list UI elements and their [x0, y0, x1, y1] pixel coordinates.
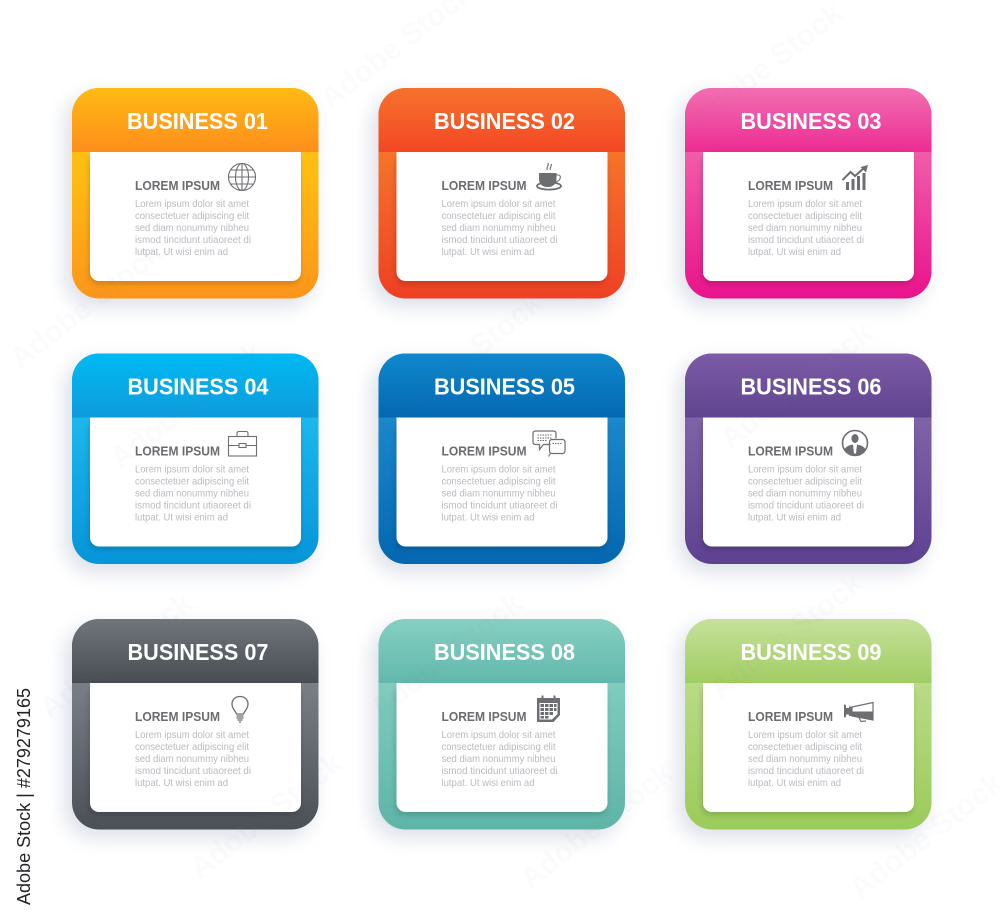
- text block: Lorem ipsum dolor sit amet: [135, 729, 249, 741]
- text block: ismod tincidunt utiaoreet di: [135, 765, 251, 777]
- heading: BUSINESS 02: [434, 108, 575, 134]
- text block: [135, 729, 251, 789]
- icon: megaphone: [844, 702, 873, 722]
- stock watermark overlay: Adobe Stock: [704, 566, 869, 706]
- text block: consectetuer adipiscing elit: [135, 741, 249, 753]
- text block: Lorem ipsum dolor sit amet: [748, 198, 862, 210]
- heading: BUSINESS 03: [740, 108, 882, 134]
- text block: [748, 198, 864, 258]
- text block: Lorem ipsum dolor sit amet: [442, 729, 556, 741]
- card: business 03: [677, 88, 932, 308]
- stock watermark overlay: Adobe Stock: [104, 336, 269, 476]
- text block: Lorem ipsum dolor sit amet: [748, 464, 862, 476]
- card: business 01: [64, 88, 318, 308]
- icon: coffee cup: [537, 163, 561, 190]
- text block: ismod tincidunt utiaoreet di: [748, 234, 864, 246]
- text block: sed diam nonummy nibheu: [442, 753, 556, 765]
- stock watermark overlay: Adobe Stock: [4, 236, 169, 376]
- heading: BUSINESS 05: [434, 374, 575, 400]
- card: business 09: [677, 619, 932, 839]
- icon: calendar: [537, 696, 560, 722]
- icon: chat bubbles: [533, 431, 565, 456]
- card: business 02: [370, 88, 625, 308]
- text block: Lorem ipsum dolor sit amet: [135, 464, 249, 476]
- stock credit: Adobe Stock | #279279165: [14, 688, 34, 905]
- text block: sed diam nonummy nibheu: [748, 753, 862, 765]
- text block: ismod tincidunt utiaoreet di: [135, 500, 251, 512]
- text block: ismod tincidunt utiaoreet di: [748, 765, 864, 777]
- text block: consectetuer adipiscing elit: [442, 210, 556, 222]
- card: business 05: [370, 354, 625, 574]
- text block: [442, 729, 558, 789]
- text block: sed diam nonummy nibheu: [135, 488, 249, 500]
- text block: lutpat. Ut wisi enim ad: [442, 246, 535, 258]
- heading: BUSINESS 09: [740, 639, 882, 665]
- text block: consectetuer adipiscing elit: [748, 210, 862, 222]
- text block: ismod tincidunt utiaoreet di: [442, 234, 558, 246]
- icon: person: [842, 430, 868, 456]
- stock watermark overlay: Adobe Stock: [34, 586, 199, 726]
- text block: lutpat. Ut wisi enim ad: [135, 777, 228, 789]
- text block: consectetuer adipiscing elit: [442, 741, 556, 753]
- heading: BUSINESS 06: [740, 374, 882, 400]
- stock watermark overlay: Adobe Stock: [714, 316, 879, 456]
- text block: Lorem ipsum dolor sit amet: [748, 729, 862, 741]
- heading: BUSINESS 08: [434, 639, 575, 665]
- text block: [748, 464, 864, 524]
- text block: lutpat. Ut wisi enim ad: [135, 512, 228, 524]
- text block: consectetuer adipiscing elit: [748, 476, 862, 488]
- text block: [135, 464, 251, 524]
- text block: [442, 464, 558, 524]
- subheading: LOREM IPSUM: [442, 444, 526, 458]
- stock watermark overlay: Adobe Stock: [384, 286, 549, 426]
- heading: BUSINESS 01: [127, 108, 268, 134]
- text block: sed diam nonummy nibheu: [135, 753, 249, 765]
- stock watermark overlay: Adobe Stock: [684, 0, 849, 136]
- text block: lutpat. Ut wisi enim ad: [442, 512, 535, 524]
- text block: lutpat. Ut wisi enim ad: [442, 777, 535, 789]
- text block: ismod tincidunt utiaoreet di: [442, 500, 558, 512]
- subheading: LOREM IPSUM: [442, 709, 526, 724]
- text block: ismod tincidunt utiaoreet di: [442, 765, 558, 777]
- text block: ismod tincidunt utiaoreet di: [135, 234, 251, 246]
- text block: lutpat. Ut wisi enim ad: [135, 246, 228, 258]
- icon: globe: [228, 164, 256, 190]
- card: business 07: [64, 619, 318, 839]
- subheading: LOREM IPSUM: [748, 709, 833, 724]
- card: business 04: [64, 354, 318, 574]
- text block: lutpat. Ut wisi enim ad: [748, 512, 841, 524]
- text block: consectetuer adipiscing elit: [748, 741, 862, 753]
- stock watermark overlay: Adobe Stock: [184, 746, 349, 886]
- icon: light bulb: [232, 696, 248, 722]
- heading: BUSINESS 04: [128, 374, 268, 400]
- text block: Lorem ipsum dolor sit amet: [442, 198, 556, 210]
- text block: sed diam nonummy nibheu: [135, 222, 249, 234]
- text block: [135, 198, 251, 258]
- subheading: LOREM IPSUM: [748, 178, 833, 193]
- text block: ismod tincidunt utiaoreet di: [748, 500, 864, 512]
- stock watermark overlay: Adobe Stock: [364, 586, 529, 726]
- text block: [442, 198, 558, 258]
- subheading: LOREM IPSUM: [135, 709, 220, 724]
- card: business 08: [370, 619, 625, 839]
- text block: consectetuer adipiscing elit: [442, 476, 556, 488]
- text block: Lorem ipsum dolor sit amet: [442, 464, 556, 476]
- subheading: LOREM IPSUM: [135, 444, 220, 458]
- text block: consectetuer adipiscing elit: [135, 476, 249, 488]
- stock watermark overlay: Adobe Stock: [514, 756, 679, 896]
- text block: sed diam nonummy nibheu: [748, 488, 862, 500]
- text block: lutpat. Ut wisi enim ad: [748, 777, 841, 789]
- text block: lutpat. Ut wisi enim ad: [748, 246, 841, 258]
- text block: Lorem ipsum dolor sit amet: [135, 198, 249, 210]
- subheading: LOREM IPSUM: [748, 444, 833, 458]
- icon: growth chart: [842, 165, 868, 190]
- heading: BUSINESS 07: [128, 639, 268, 665]
- subheading: LOREM IPSUM: [135, 178, 220, 193]
- text block: sed diam nonummy nibheu: [748, 222, 862, 234]
- subheading: LOREM IPSUM: [442, 178, 526, 193]
- text block: sed diam nonummy nibheu: [442, 488, 556, 500]
- text block: [748, 729, 864, 789]
- card: business 06: [677, 354, 932, 574]
- text block: sed diam nonummy nibheu: [442, 222, 556, 234]
- text block: consectetuer adipiscing elit: [135, 210, 249, 222]
- icon: briefcase: [228, 432, 256, 456]
